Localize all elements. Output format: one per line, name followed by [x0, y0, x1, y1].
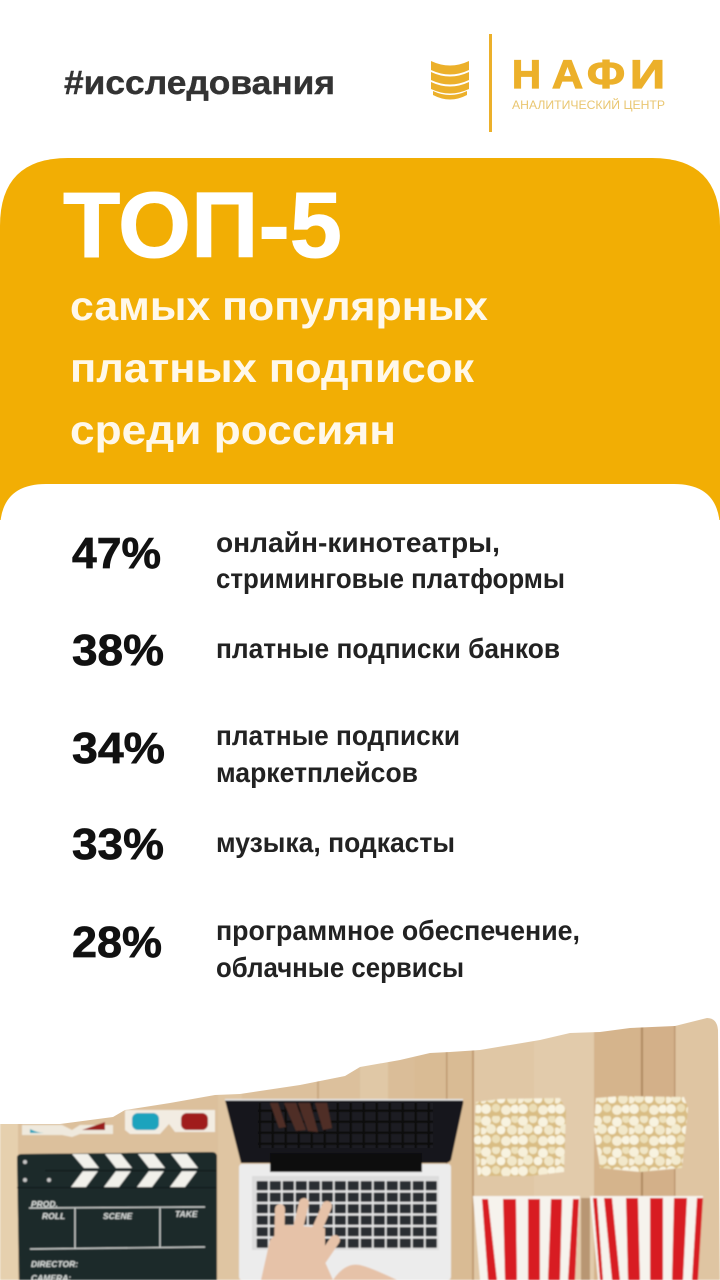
subtitle: самых популярных	[70, 283, 488, 329]
laptop	[225, 1099, 463, 1280]
title: ТОП-5	[63, 173, 342, 277]
right hand	[333, 1265, 397, 1280]
subtitle: среди россиян	[70, 407, 396, 453]
3D glasses left	[22, 1122, 113, 1137]
clapperboard	[17, 1152, 217, 1280]
item 1: стриминговые платформы	[216, 563, 565, 594]
logo name: И	[630, 53, 665, 97]
item 3: маркетплейсов	[216, 757, 418, 788]
popcorn right	[594, 1096, 688, 1172]
panel: white list card	[0, 484, 720, 1280]
item 5: программное обеспечение,	[216, 915, 580, 946]
photo: desk with movie items	[0, 1010, 720, 1280]
item 1: онлайн-кинотеатры,	[216, 527, 500, 558]
3D glasses right	[125, 1110, 215, 1134]
panel: orange header	[0, 158, 720, 520]
subtitle: платных подписок	[70, 345, 475, 391]
logo subtitle: АНАЛИТИЧЕСКИЙ ЦЕНТР	[512, 97, 665, 112]
left hand	[261, 1203, 335, 1280]
item 2: платные подписки банков	[216, 633, 560, 664]
hashtag heading: #исследования	[64, 64, 335, 101]
popcorn left	[474, 1098, 566, 1176]
popcorn box left	[473, 1196, 580, 1280]
item 3: 34%	[72, 724, 165, 773]
icon: coin stack	[431, 61, 469, 100]
item 1: 47%	[72, 529, 161, 578]
item 5: 28%	[72, 918, 162, 967]
wood planks	[0, 1010, 720, 1280]
item 4: 33%	[72, 820, 164, 869]
item 4: музыка, подкасты	[216, 827, 455, 858]
item 1	[72, 527, 565, 594]
clapperboard: PROD.	[31, 1199, 58, 1209]
logo name: Ф	[587, 53, 625, 97]
popcorn box right	[590, 1196, 703, 1280]
logo name: Н	[512, 53, 541, 97]
logo divider	[489, 34, 492, 132]
item 5	[72, 915, 580, 983]
item 3: платные подписки	[216, 720, 460, 751]
item 3	[72, 720, 460, 788]
item 2: 38%	[72, 626, 164, 675]
logo: NAFI	[431, 34, 665, 132]
item 2	[72, 626, 560, 675]
logo name	[512, 53, 665, 97]
clapperboard: ROLL	[42, 1211, 65, 1221]
clapperboard: SCENE	[103, 1211, 133, 1221]
logo name: А	[552, 53, 583, 97]
clapperboard: DIRECTOR:	[31, 1259, 78, 1269]
item 5: облачные сервисы	[216, 952, 464, 983]
item 4	[72, 820, 455, 869]
clapperboard: TAKE	[175, 1209, 198, 1219]
subtitle	[70, 283, 488, 453]
